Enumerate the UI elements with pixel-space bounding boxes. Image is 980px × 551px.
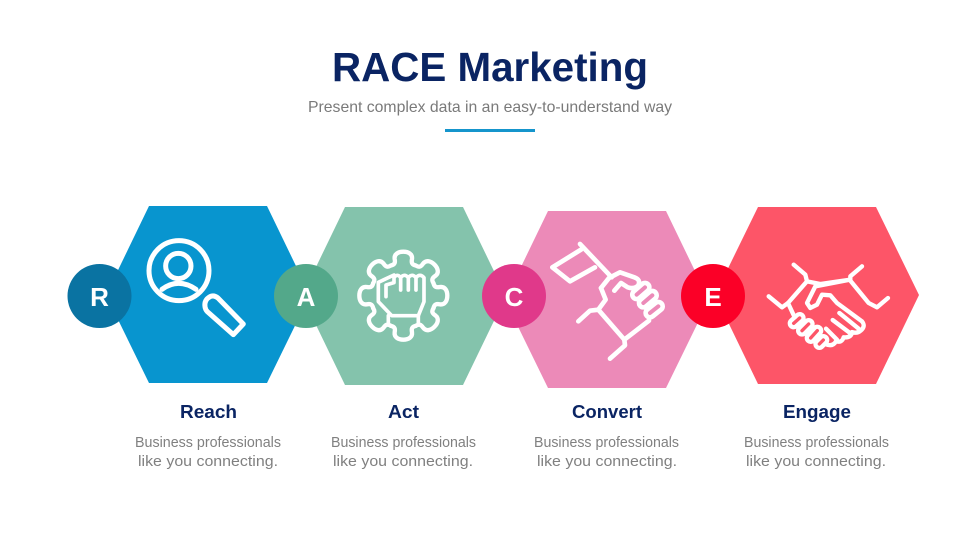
panel: convert hexagon — [505, 211, 709, 388]
text block: convert: Business professionals — [534, 434, 679, 451]
text block: reach — [135, 402, 281, 470]
panel: engage hexagon — [715, 207, 919, 384]
text block: act: like you connecting. — [333, 453, 473, 470]
text block: engage: Business professionals — [744, 434, 889, 451]
text block: convert: Convert — [572, 402, 642, 422]
text block: act — [331, 402, 476, 470]
badge: E — [681, 264, 745, 328]
text block: act: Act — [388, 402, 419, 422]
panel: reach hexagon — [106, 206, 310, 383]
title: RACE Marketing — [332, 44, 648, 90]
badge: C: C — [505, 282, 524, 312]
text block: convert — [534, 402, 679, 470]
badge: A — [274, 264, 338, 328]
subtitle: Present complex data in an easy-to-understand way — [308, 99, 672, 116]
icon: magnifying glass with person — [149, 241, 243, 335]
text block: engage: Engage — [783, 402, 851, 422]
icon: handshake — [769, 265, 888, 345]
text block: engage: like you connecting. — [746, 453, 886, 470]
badge: C — [482, 264, 546, 328]
icon: fist in gear — [359, 252, 447, 340]
text block: reach: like you connecting. — [138, 453, 278, 470]
panel: act hexagon — [302, 207, 506, 385]
text block: convert: like you connecting. — [537, 453, 677, 470]
badge: R — [68, 264, 132, 328]
badge: R: R — [90, 282, 109, 312]
text block: reach: Business professionals — [135, 434, 281, 451]
badge: E: E — [704, 282, 722, 312]
text block: reach: Reach — [180, 402, 237, 422]
title underline — [445, 129, 535, 132]
text block: engage — [744, 402, 889, 470]
text block: act: Business professionals — [331, 434, 476, 451]
badge: A: A — [297, 282, 316, 312]
icon: hand holding flag — [552, 244, 658, 359]
